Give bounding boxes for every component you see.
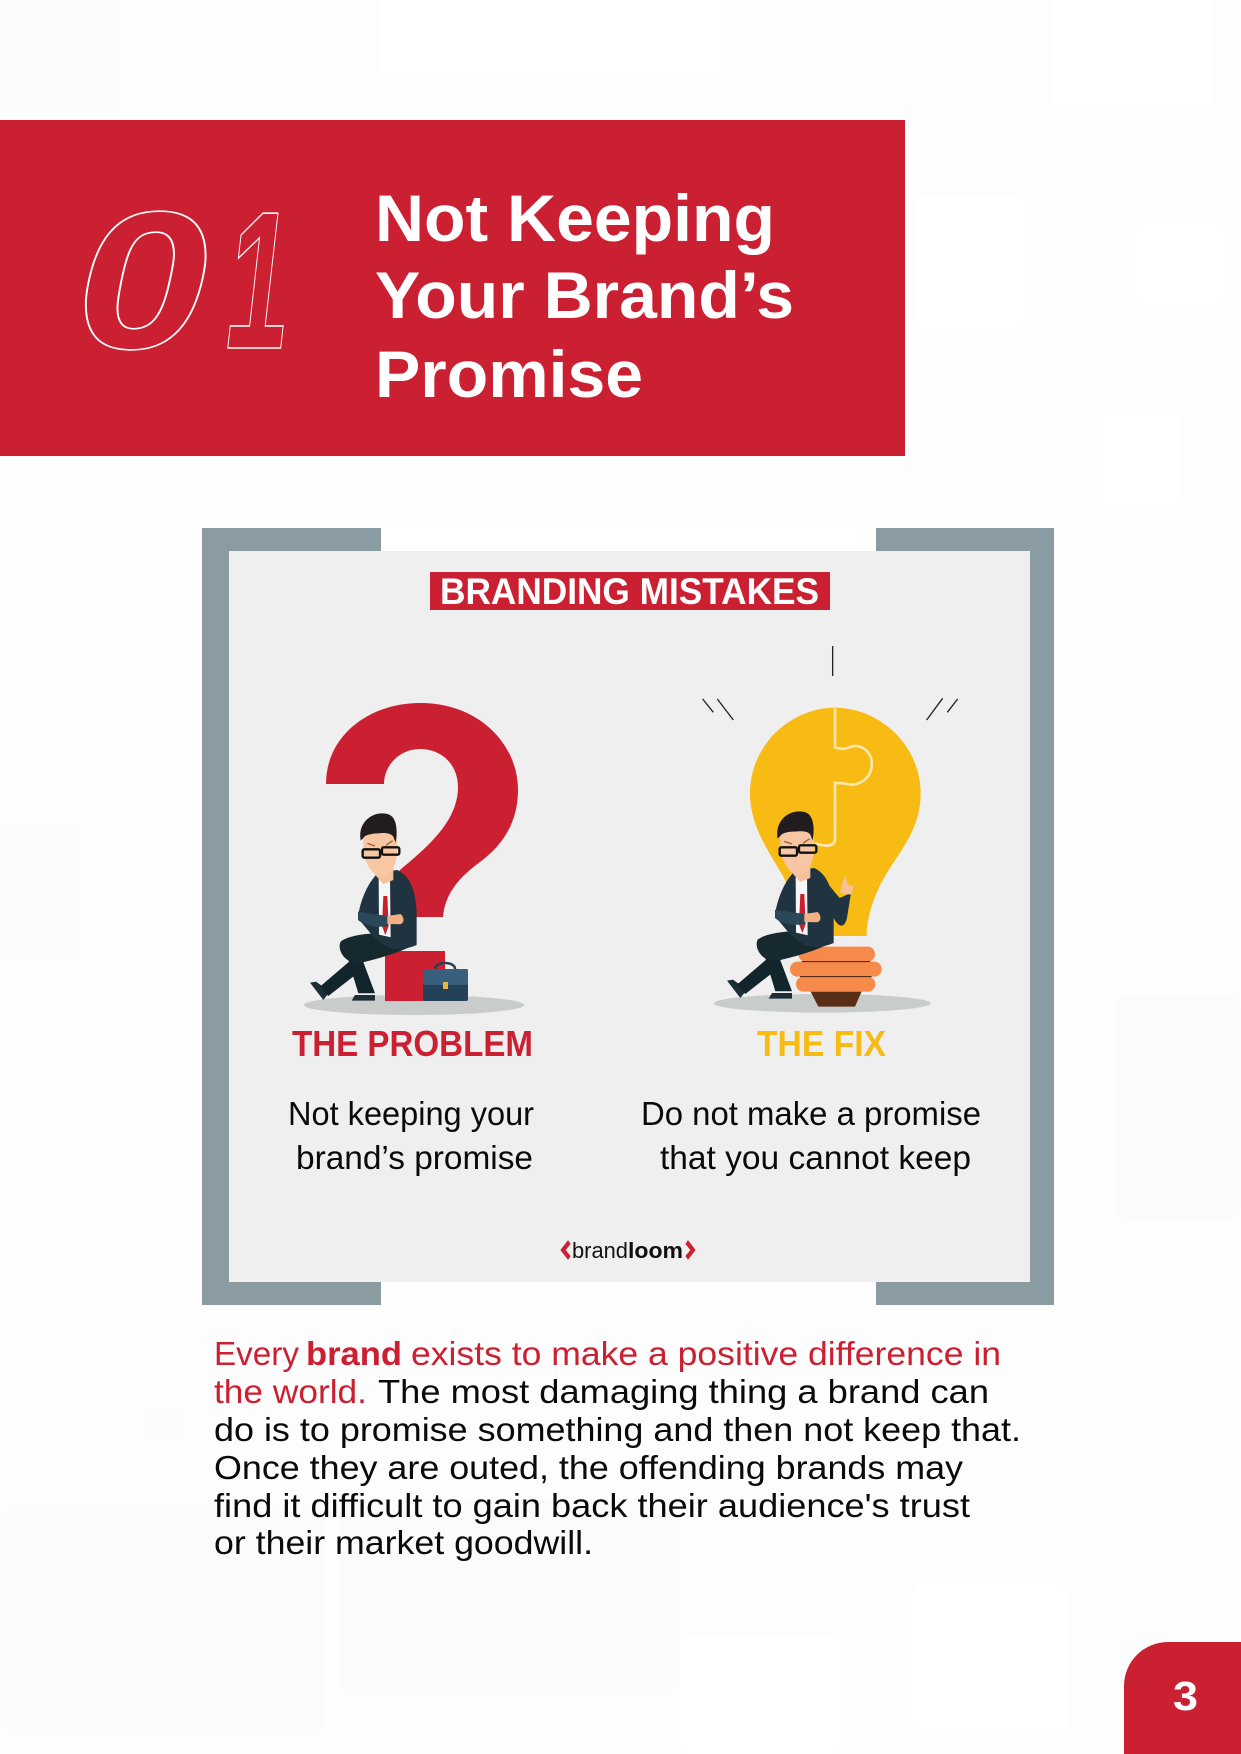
page number tab: 3 (1173, 1673, 1198, 1719)
banner title: Your Brand’s (375, 258, 794, 332)
illustration: the problem (304, 703, 524, 1015)
heading: the problem: THE PROBLEM (292, 1023, 533, 1064)
logo: brandloom: loom (628, 1238, 683, 1263)
text: problem description: Not keeping your (288, 1095, 534, 1132)
text: body paragraph: exists to make a positive difference in (411, 1335, 1001, 1372)
text: fix description: Do not make a promise (641, 1095, 981, 1132)
icon: lightbulb with puzzle seam and light rays (703, 646, 958, 1013)
text: body paragraph: The most damaging thing a brand can (378, 1373, 989, 1410)
header banner (0, 120, 905, 456)
text: body paragraph: Once they are outed, the offending brands may (214, 1449, 964, 1486)
text: fix description (641, 1095, 981, 1176)
text: problem description (288, 1095, 534, 1176)
logo: brandloom (561, 1238, 695, 1263)
text: fix description: that you cannot keep (660, 1139, 971, 1176)
panel: branding mistakes card (202, 528, 1054, 1305)
outlined number 01: 1 (226, 171, 289, 390)
text: body paragraph: do is to promise something and then not keep that. (214, 1411, 1021, 1448)
icon: bulb glass (750, 708, 921, 936)
banner title: Not Keeping (375, 181, 775, 255)
outlined number 01 (76, 171, 289, 390)
illustration: the fix (703, 646, 958, 1013)
banner title: Promise (375, 337, 643, 411)
text: body paragraph (214, 1335, 1021, 1561)
logo: brandloom: brand (572, 1238, 628, 1263)
icon: briefcase (423, 963, 468, 1001)
banner title (375, 181, 794, 411)
icon: thinking businessman (310, 813, 417, 1001)
text: problem description: brand’s promise (296, 1139, 533, 1176)
icon: red question mark (326, 703, 518, 1001)
text: body paragraph: Every (214, 1335, 299, 1372)
icon: bulb base (790, 947, 882, 1007)
text: body paragraph: the world. (214, 1373, 367, 1410)
outlined number 01: 0 (76, 171, 208, 390)
card heading badge: BRANDING MISTAKES (440, 571, 819, 612)
page number tab (1124, 1642, 1241, 1754)
icon: light rays (703, 646, 958, 720)
text: body paragraph: find it difficult to gain back their audience's trust (214, 1487, 970, 1524)
icon: ground shadow (304, 995, 524, 1015)
icon: businessman with idea (727, 811, 854, 999)
icon: ground shadow (714, 994, 931, 1013)
heading: the fix: THE FIX (757, 1023, 886, 1064)
text: body paragraph: or their market goodwill. (214, 1524, 593, 1561)
text: body paragraph: brand (306, 1335, 402, 1372)
